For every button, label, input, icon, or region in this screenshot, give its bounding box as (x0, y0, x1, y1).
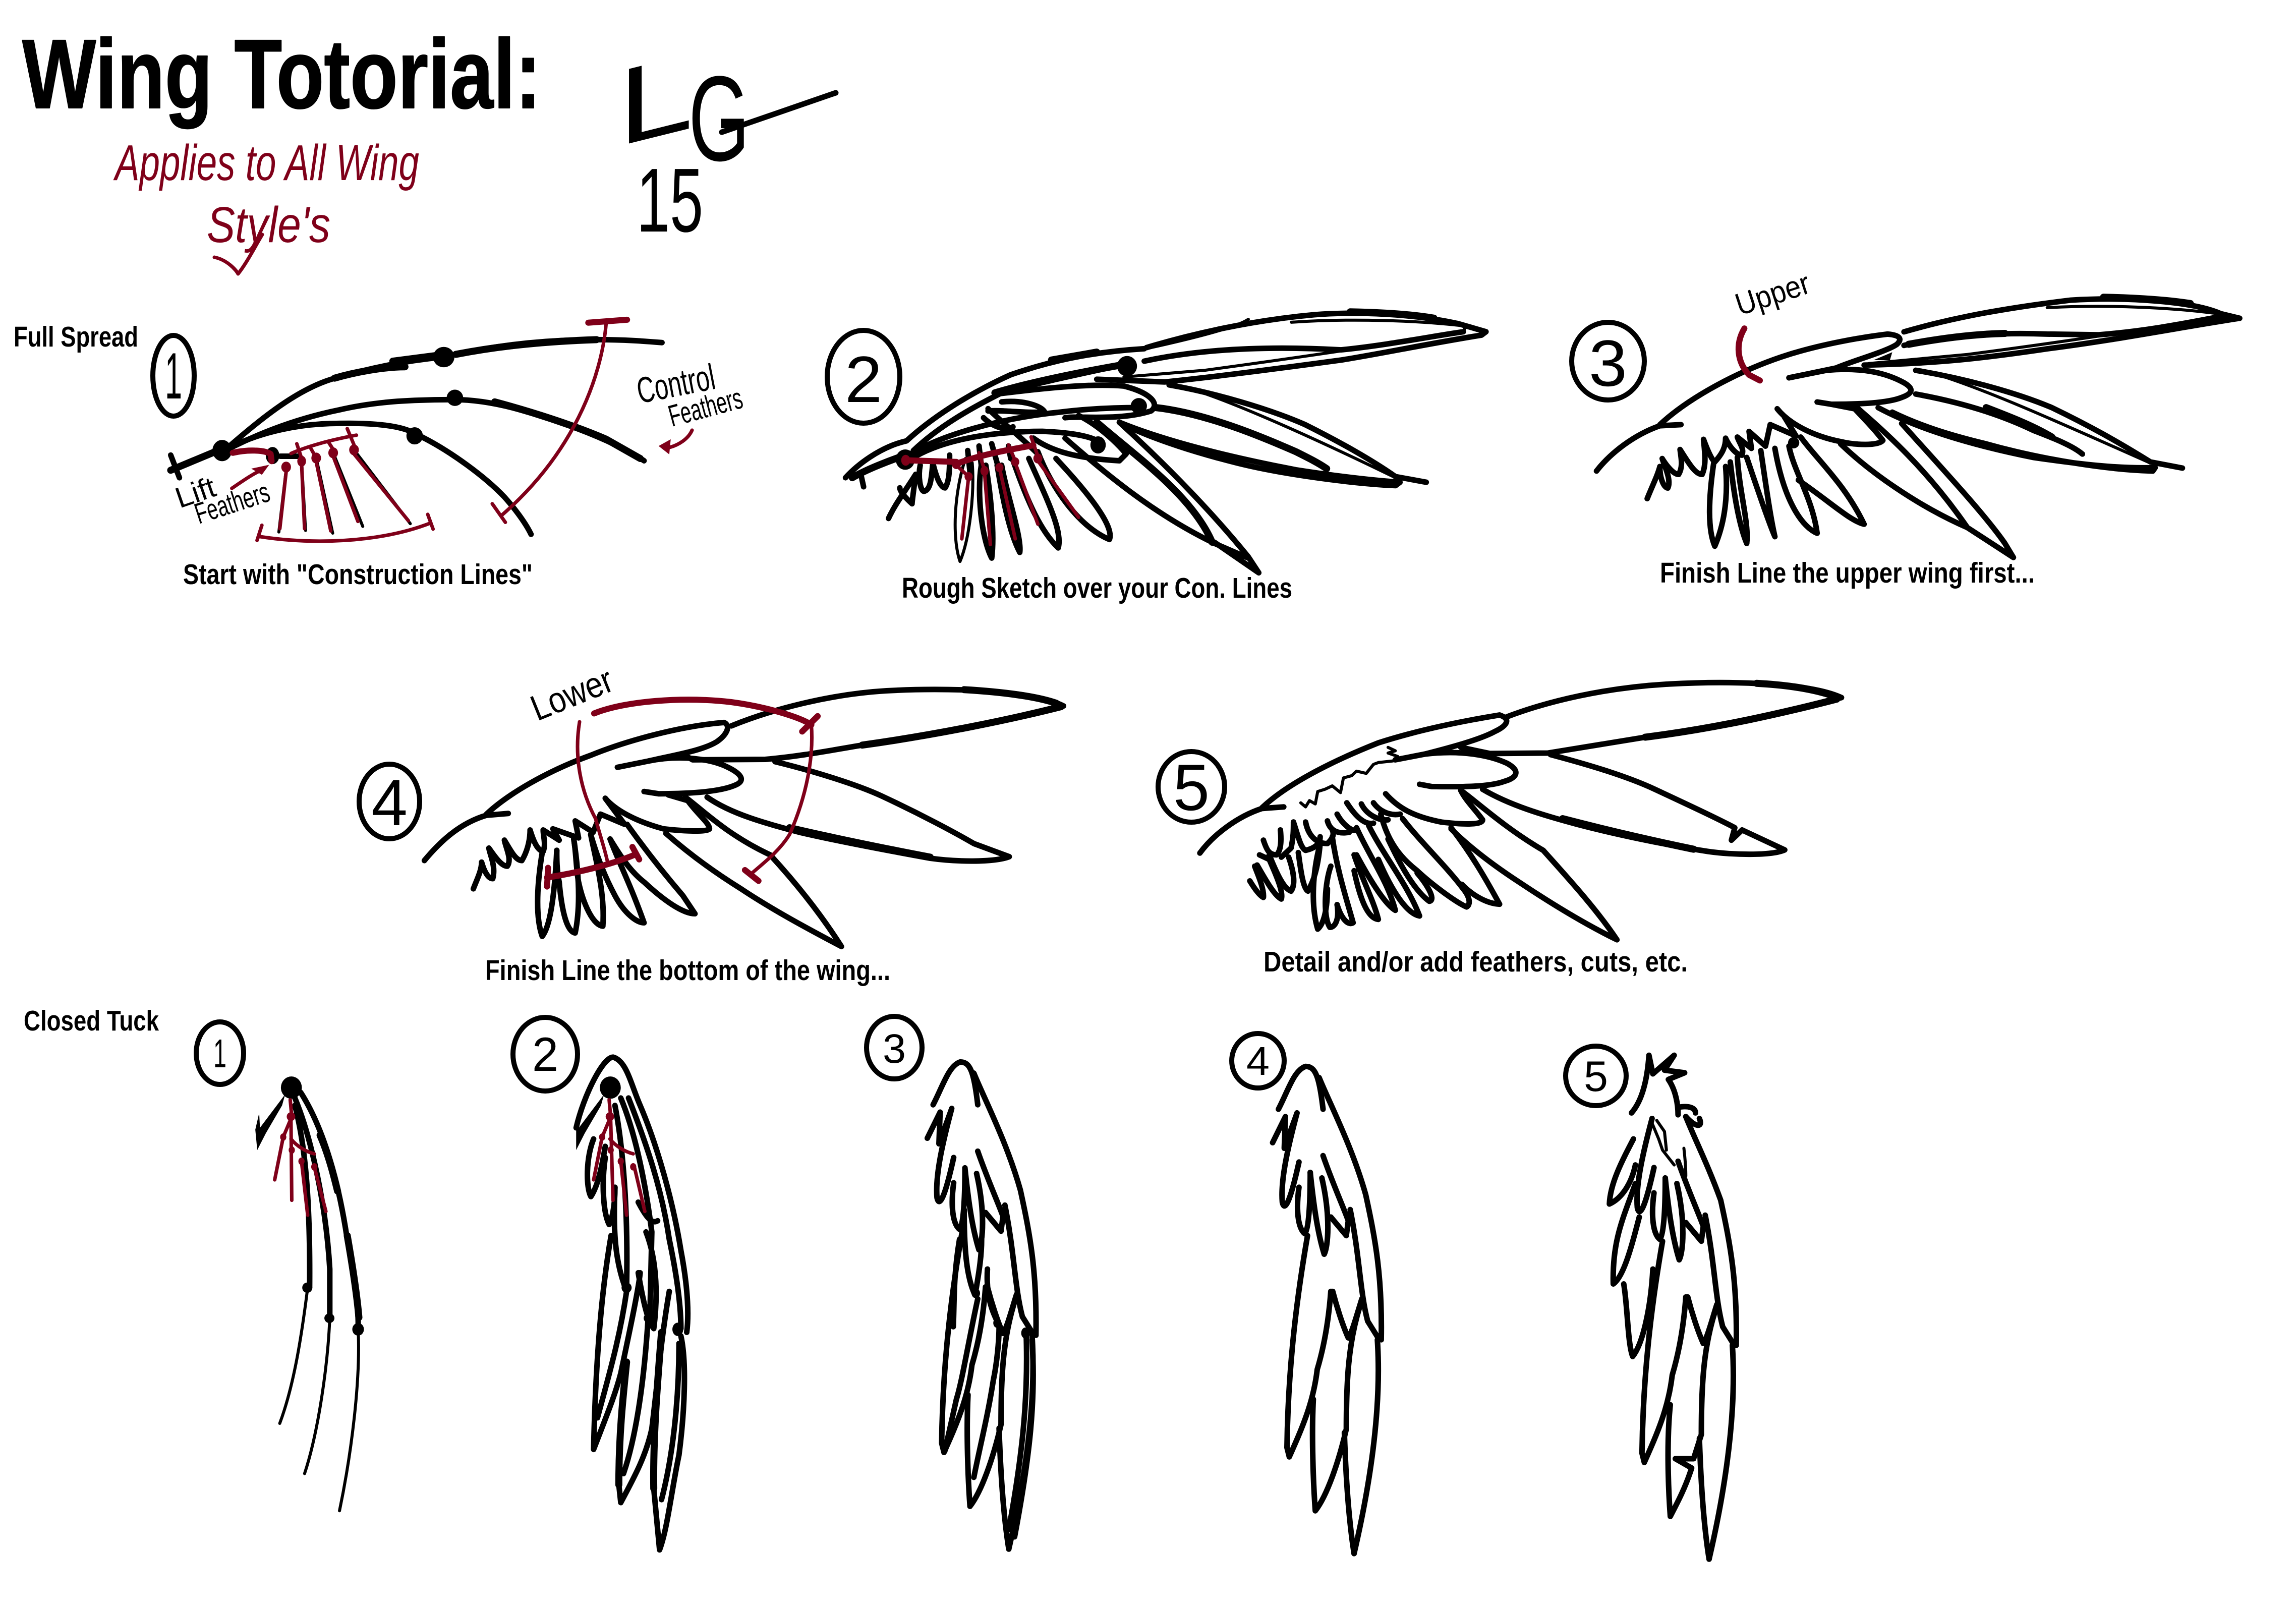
panel: closed tuck step 3 (867, 1016, 1036, 1549)
caption: Rough Sketch over your Con. Lines (902, 572, 1292, 604)
panel: closed tuck step 2 (513, 1017, 688, 1550)
step number 2: 2 (532, 1028, 558, 1081)
red guide marks (232, 320, 692, 541)
step number 4 (1232, 1034, 1284, 1088)
wing line art: detailed (1200, 682, 1842, 940)
red guide marks (275, 1100, 326, 1215)
label: control feathers: Feathers (665, 381, 746, 433)
subtitle (113, 135, 419, 274)
step number 3: 3 (883, 1026, 906, 1072)
label: lift feathers: Lift (171, 471, 220, 514)
red marker: upper (1739, 328, 1760, 380)
panel: closed tuck step 5 (1566, 1046, 1737, 1559)
step number 4: 4 (1246, 1039, 1270, 1083)
panel: full spread step 3 (1572, 266, 2240, 589)
wing line art: lower finished (424, 690, 1064, 947)
rough sketch (845, 312, 1486, 573)
subtitle: Applies to All Wing (113, 135, 419, 191)
step number 5 (1566, 1046, 1626, 1106)
signature: G (688, 51, 750, 186)
red guide marks (901, 437, 1078, 544)
caption: Start with "Construction Lines" (183, 558, 533, 591)
step number 3 (867, 1016, 922, 1079)
step number 1 (196, 1022, 244, 1084)
label: lift feathers (171, 471, 274, 530)
panel: full spread step 2 (827, 312, 1486, 604)
red guide marks (594, 1100, 645, 1215)
wing line art (1273, 1066, 1382, 1554)
title: Wing Totorial: (22, 19, 541, 129)
section label: closed tuck: Closed Tuck (24, 1005, 159, 1037)
panel: closed tuck step 4 (1232, 1034, 1382, 1554)
label: control feathers (634, 357, 746, 433)
panel: full spread step 4 (359, 660, 1064, 987)
label: lower: Lower (525, 660, 619, 729)
rough sketch (576, 1057, 688, 1550)
wing line art with details (1610, 1055, 1737, 1559)
signature: 15 (637, 150, 703, 251)
step number 5: 5 (1584, 1053, 1608, 1101)
subtitle: Style's (207, 197, 330, 253)
step number 5: 5 (1173, 751, 1210, 824)
label: control feathers: Control (634, 357, 718, 412)
step number 5 (1158, 751, 1225, 824)
step number 1: 1 (213, 1031, 226, 1076)
construction lines (255, 1076, 364, 1511)
construction lines (170, 339, 662, 534)
panel: closed tuck step 1 (196, 1022, 364, 1511)
panel: full spread step 5 (1158, 682, 1842, 978)
wing line art (927, 1062, 1036, 1549)
signature: L (618, 29, 693, 169)
panel: full spread step 1 (153, 320, 746, 591)
step number 1: 1 (165, 339, 182, 413)
step number 3 (1572, 322, 1644, 400)
signature (618, 29, 836, 251)
step number 1 (153, 335, 194, 416)
section label: full spread: Full Spread (14, 321, 138, 353)
step number 4: 4 (371, 766, 408, 839)
red guide marks (547, 700, 818, 887)
step number 3: 3 (1589, 326, 1627, 400)
step number 4 (359, 764, 420, 839)
caption: Finish Line the upper wing first... (1660, 557, 2035, 589)
label: upper: Upper (1731, 266, 1814, 322)
caption: Finish Line the bottom of the wing... (485, 954, 890, 987)
wing line art: upper finished (1596, 297, 2240, 557)
step number 2: 2 (845, 342, 882, 416)
step number 2 (827, 330, 900, 423)
label: lift feathers: Feathers (191, 476, 274, 530)
caption: Detail and/or add feathers, cuts, etc. (1264, 946, 1688, 978)
step number 2 (513, 1017, 578, 1091)
